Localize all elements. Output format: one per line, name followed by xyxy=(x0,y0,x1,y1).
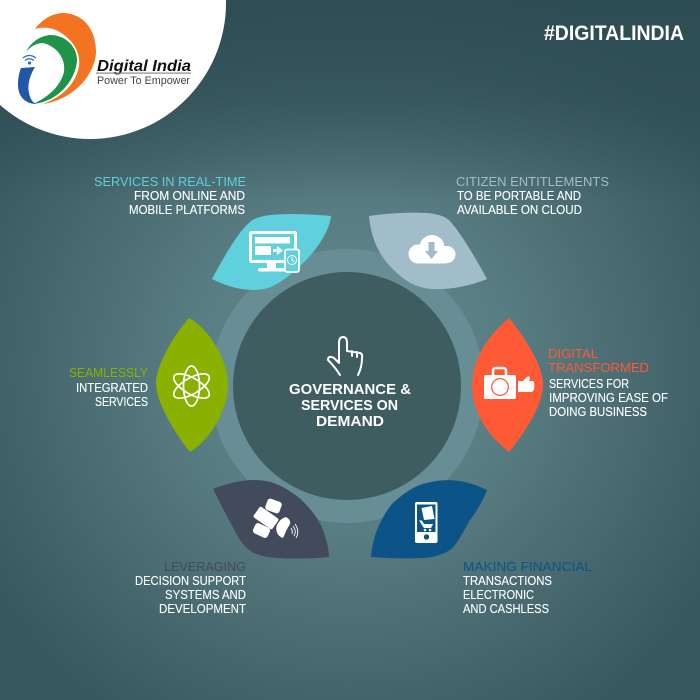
text: leveraging xyxy=(135,559,246,616)
icon: phone with cart xyxy=(415,502,438,543)
segment: citizen entitlements xyxy=(369,213,487,289)
outer ring xyxy=(210,249,484,523)
inner circle xyxy=(233,272,461,500)
text: digital transformed: DOING BUSINESS xyxy=(549,404,647,419)
text: making financial: AND CASHLESS xyxy=(463,601,549,616)
center panel xyxy=(289,337,411,430)
text: services in real-time: MOBILE PLATFORMS xyxy=(129,202,245,217)
logo wordmark: Digital India xyxy=(97,58,191,75)
logo: green arc xyxy=(26,35,77,104)
logo tagline: Power To Empower xyxy=(97,75,190,87)
text: leveraging: LEVERAGING xyxy=(164,559,246,574)
segment: seamlessly xyxy=(156,318,228,452)
text: services in real-time: FROM ONLINE AND xyxy=(134,188,245,203)
icon: camera and thumbs up xyxy=(484,368,534,399)
text: making financial xyxy=(463,559,592,616)
text: citizen entitlements: CITIZEN ENTITLEMENTS xyxy=(456,174,609,189)
text: digital transformed: DIGITAL xyxy=(548,346,598,361)
text: leveraging: DEVELOPMENT xyxy=(159,601,246,616)
center title: GOVERNANCE & xyxy=(289,381,411,398)
text: seamlessly xyxy=(69,365,148,409)
icon: monitor and phone xyxy=(250,232,299,272)
logo rule xyxy=(96,72,191,74)
segment: leveraging xyxy=(213,480,329,559)
center title line 3: DEMAND xyxy=(316,413,384,430)
text: seamlessly: INTEGRATED xyxy=(76,380,148,395)
segment: making financial xyxy=(371,480,487,558)
logo: wifi symbol xyxy=(23,56,36,64)
logo: orange arc xyxy=(35,13,96,104)
leaf: grey-blue xyxy=(369,213,487,289)
text: citizen entitlements: TO BE PORTABLE AND xyxy=(457,188,581,203)
leaf: cyan xyxy=(212,214,331,290)
text: services in real-time: SERVICES IN REAL-TIME xyxy=(94,174,246,189)
white corner circle xyxy=(0,0,226,139)
text: leveraging: SYSTEMS AND xyxy=(165,587,246,602)
text: citizen entitlements: AVAILABLE ON CLOUD xyxy=(457,202,582,217)
text: making financial: ELECTRONIC xyxy=(463,587,534,602)
segment: services in real-time xyxy=(212,214,331,290)
hashtag: #DIGITALINDIA xyxy=(544,22,684,45)
center title line 2: SERVICES ON xyxy=(301,397,398,414)
text: digital transformed: SERVICES FOR xyxy=(549,376,629,391)
text: making financial: TRANSACTIONS xyxy=(463,573,552,588)
icon: satellite xyxy=(252,498,298,539)
text: making financial: MAKING FINANCIAL xyxy=(463,559,592,574)
leaf: red xyxy=(472,318,543,452)
leaf: blue xyxy=(371,480,487,558)
leaf: dark slate xyxy=(213,480,329,559)
logo badge xyxy=(0,0,226,139)
icon: cloud download xyxy=(408,235,456,264)
text: digital transformed xyxy=(548,346,668,419)
leaf: green xyxy=(156,318,228,452)
text: digital transformed: TRANSFORMED xyxy=(548,360,649,375)
icon: pointing hand xyxy=(328,337,362,375)
icon: atom xyxy=(170,366,213,406)
text: digital transformed: IMPROVING EASE OF xyxy=(549,390,668,405)
text: citizen entitlements xyxy=(456,174,609,217)
text: seamlessly: SERVICES xyxy=(95,394,148,409)
text: seamlessly: SEAMLESSLY xyxy=(69,365,148,380)
segment: digital transformed xyxy=(472,318,543,452)
text: services in real-time xyxy=(94,174,246,217)
text: leveraging: DECISION SUPPORT xyxy=(135,573,246,588)
logo: blue stem xyxy=(18,67,36,104)
